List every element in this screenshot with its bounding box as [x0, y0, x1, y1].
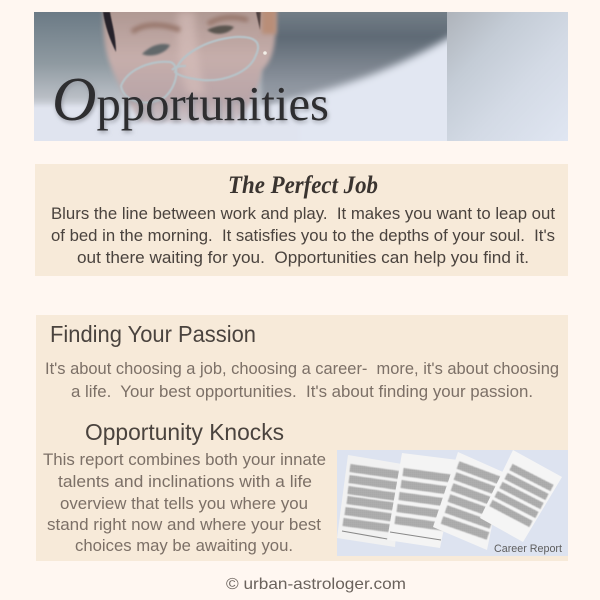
text block: report description: This report combines both your innate: [43, 450, 326, 469]
page 4: [480, 450, 562, 542]
eyes: [142, 44, 170, 56]
footer credit: © urban-astrologer.com: [226, 576, 406, 593]
page 2: [387, 453, 458, 548]
photo banner: Opportunities: [52, 66, 329, 134]
paper sheet: [262, 32, 447, 115]
text block: job description: of bed in the morning. It satisfies you to the depths of your soul. It's: [51, 226, 555, 245]
text block: report description: stand right now and where your best: [47, 515, 321, 534]
panel: the perfect job: [35, 164, 568, 276]
panel: finding your passion: [36, 315, 568, 561]
report pages image: [337, 450, 568, 556]
text block: report description: overview that tells you where you: [60, 494, 308, 513]
heading: the perfect job: The Perfect Job: [228, 172, 378, 199]
text block: job description: out there waiting for you. Opportunities can help you find it.: [77, 248, 529, 267]
text block: report description: choices may be awaiting you.: [75, 536, 293, 555]
text block: passion description: It's about choosing a job, choosing a career- more, it's about choosing: [45, 359, 559, 378]
text block: report description: [43, 450, 326, 555]
glasses: [121, 37, 258, 103]
face: [103, 6, 276, 122]
text block: report description: talents and inclinations with a life: [58, 472, 312, 491]
page 1: [337, 455, 402, 547]
photo banner: [34, 12, 568, 141]
text block: job description: [51, 204, 555, 267]
heading: finding your passion: Finding Your Passion: [50, 321, 256, 347]
text block: job description: Blurs the line between work and play. It makes you want to leap out: [51, 204, 555, 223]
text block: passion description: [45, 359, 559, 401]
page 3: [433, 452, 503, 550]
hair: [103, 12, 116, 52]
title word in the photo: Opportunities: [53, 68, 330, 136]
heading: opportunity knocks: Opportunity Knocks: [85, 419, 284, 445]
text block: passion description: a life. Your best opportunities. It's about finding your passion.: [71, 382, 533, 401]
image caption: Career Report: [494, 543, 562, 555]
